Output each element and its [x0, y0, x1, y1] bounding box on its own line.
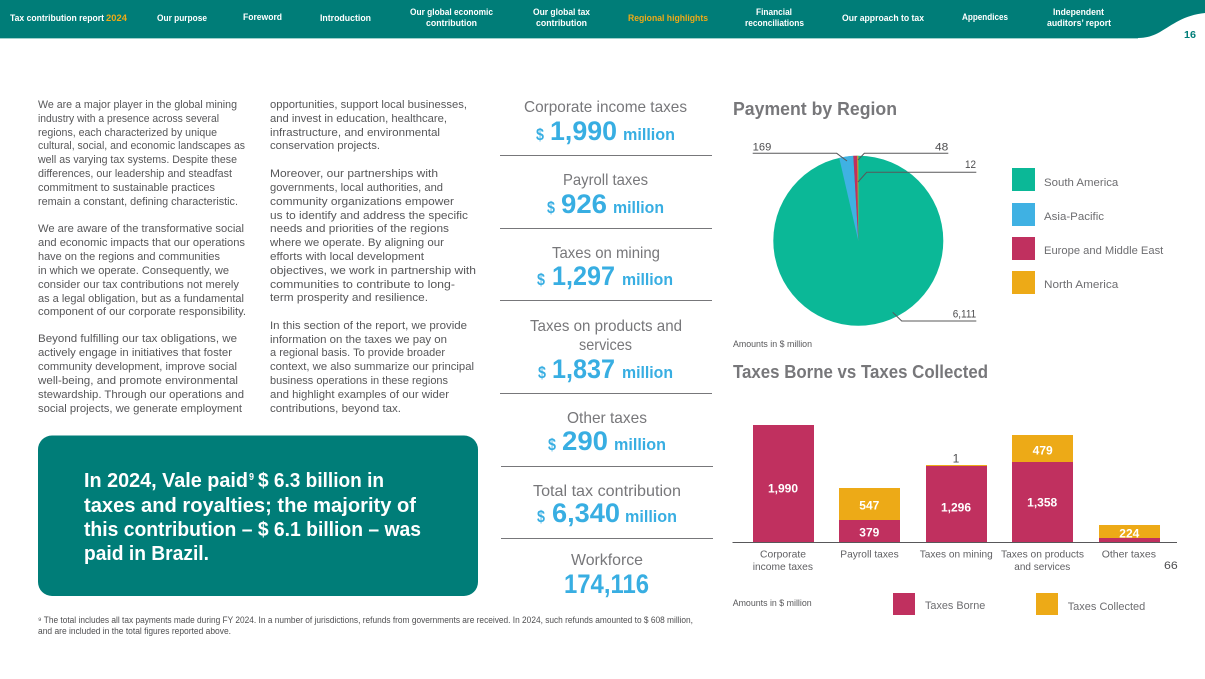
body text column 2: and invest in education, healthcare, [270, 113, 447, 125]
stat: payroll taxes: Payroll taxes [563, 172, 648, 189]
body text column 2: context, we also summarize our principal [270, 361, 474, 373]
heading: payment by region: Payment by Region [733, 98, 897, 119]
body text column 1: actively engage in initiatives that foster [38, 347, 232, 359]
body text column 1: well-being, and promote environmental [37, 375, 238, 387]
stat: corporate income taxes: million [623, 125, 675, 144]
body text column 1: component of our corporate responsibility. [38, 306, 246, 318]
callout: 2024 summary: In 2024, Vale paid [84, 470, 248, 492]
bar: taxes on products and services: 479 [1033, 443, 1053, 457]
axis labels: income taxes [753, 561, 813, 573]
pie chart: payment by region: 6,111 [953, 308, 976, 320]
top navigation bar: Financial [756, 7, 792, 18]
bar: payroll taxes: 379 [859, 526, 880, 540]
body text column 1: We are a major player in the global mining [38, 99, 237, 111]
callout: 2024 summary: 9 [249, 472, 254, 483]
top navigation bar: Our global economic [410, 7, 493, 18]
body text column 2 [269, 99, 476, 415]
bar: corporate income taxes [753, 425, 814, 542]
top navigation bar: Our global tax [533, 7, 591, 18]
body text column 2: conservation projects. [270, 140, 380, 152]
stat: payroll taxes: $ [547, 198, 555, 217]
body text column 1: well as varying tax systems. Despite these [37, 154, 237, 166]
bar: other taxes [1099, 525, 1160, 542]
stat: total tax contribution: Total tax contribution [533, 483, 681, 500]
body text column 1 [37, 99, 246, 415]
top navigation bar: Tax contribution report [10, 13, 105, 24]
stat: other taxes: Other taxes [567, 410, 647, 427]
callout: 2024 summary: $ 6.3 billion in [258, 470, 384, 492]
callout: 2024 summary: paid in Brazil. [84, 543, 209, 565]
axis labels: Corporate [760, 548, 806, 560]
stat: total tax contribution [533, 483, 681, 528]
stat: taxes on mining: million [622, 270, 673, 289]
body text column 2: contributions, beyond tax. [270, 403, 401, 415]
legend: regions: North America [1044, 279, 1119, 291]
body text column 2: us to identify and address the specific [270, 210, 469, 222]
stat: other taxes [548, 410, 666, 456]
body text column 1: and economic impacts that our operations [38, 237, 245, 249]
top navigation bar: Introduction [320, 13, 371, 24]
footnote [38, 615, 693, 636]
note: pie amounts: Amounts in $ million [733, 339, 812, 349]
pie chart: payment by region [753, 142, 976, 326]
body text column 1: consider our tax contributions not merely [38, 279, 239, 291]
body text column 2: needs and priorities of the regions [270, 223, 450, 235]
body text column 2: efforts with local development [270, 251, 424, 263]
stat: taxes on products and services: $ [538, 363, 546, 382]
stat: corporate income taxes: $ [536, 125, 544, 144]
top navigation bar: Independent [1053, 7, 1105, 18]
callout: 2024 summary: this contribution – $ 6.1 billion – was [84, 519, 421, 541]
bar: taxes on mining: 1,296 [941, 500, 971, 514]
body text column 1: stewardship. Through our operations and [38, 389, 244, 401]
stat: corporate income taxes [524, 99, 687, 146]
body text column 1: commitment to sustainable practices [38, 182, 215, 194]
footnote: and are included in the total figures reported above. [38, 626, 231, 636]
body text column 2: business operations in these regions [270, 375, 448, 387]
body text column 1: community development, improve social [38, 361, 237, 373]
top navigation bar: Appendices [962, 12, 1008, 23]
body text column 1: remain a constant, defining characteristic. [38, 196, 238, 208]
body text column 2: objectives, we work in partnership with [270, 265, 476, 277]
stat: taxes on products and services: Taxes on products and [530, 318, 682, 335]
body text column 2: and highlight examples of our wider [270, 389, 449, 401]
footnote: ⁹ The total includes all tax payments made during FY 2024. In a number of jurisdictions, refunds from governments are received. In 2024, such refunds amounted to $ 608 million, [38, 615, 693, 625]
body text column 2: Moreover, our partnerships with [270, 168, 438, 180]
stat: taxes on mining: 1,297 [552, 261, 615, 291]
heading: taxes borne vs taxes collected: Taxes Borne vs Taxes Collected [733, 361, 988, 382]
bar: taxes on products and services [1012, 435, 1073, 542]
body text column 1: Beyond fulfilling our tax obligations, we [38, 333, 237, 345]
callout: 2024 summary: taxes and royalties; the majority of [84, 495, 416, 517]
stacked bar chart [732, 425, 1178, 573]
stat: total tax contribution: 6,340 [552, 498, 620, 528]
body text column 1: differences, our leadership and steadfast [38, 168, 232, 180]
stat: other taxes: $ [548, 435, 556, 454]
bar: taxes on mining [926, 452, 987, 542]
bar: taxes on mining: 1 [953, 452, 960, 466]
top navigation bar: Regional highlights [628, 13, 708, 24]
top navigation bar: Our approach to tax [842, 13, 925, 24]
body text column 1: We are aware of the transformative social [38, 223, 244, 235]
body text column 2: information on the taxes we pay on [270, 334, 447, 346]
top navigation bar: reconciliations [745, 18, 804, 29]
stat: workforce: 174,116 [564, 569, 649, 599]
legend: taxes borne and collected [893, 593, 1145, 615]
top navigation bar: contribution [536, 18, 587, 29]
stat: taxes on products and services: 1,837 [552, 354, 615, 384]
legend: regions: Europe and Middle East [1044, 245, 1163, 257]
bar: payroll taxes [839, 488, 900, 542]
stat: taxes on products and services [530, 318, 682, 384]
top navigation bar: Foreword [243, 12, 282, 23]
stat: other taxes: million [614, 435, 666, 454]
top navigation bar: 2024 [106, 13, 128, 24]
pie chart: payment by region: 169 [753, 142, 771, 154]
stat: taxes on products and services: million [622, 363, 673, 382]
stat: payroll taxes [547, 172, 664, 219]
body text column 1: cultural, social, and economic landscapes as [38, 140, 245, 152]
body text column 1: as a legal obligation, but as a fundamental [38, 293, 244, 305]
stat: total tax contribution: million [625, 507, 677, 526]
body text column 1: in which we operate. Consequently, we [38, 265, 229, 277]
body text column 2: a regional basis. To provide broader [270, 347, 445, 359]
bar: corporate income taxes: 1,990 [768, 482, 798, 496]
stat: taxes on mining [537, 245, 673, 291]
body text column 2: infrastructure, and environmental [270, 127, 440, 139]
stat: workforce [564, 552, 649, 599]
callout: 2024 summary [38, 436, 478, 596]
axis labels: and services [1014, 561, 1070, 573]
axis labels: Taxes on products [1001, 548, 1084, 560]
top navigation bar: contribution [426, 18, 477, 29]
body text column 1: industry with a presence across several [38, 113, 219, 125]
body text column 1: social projects, we generate employment [38, 403, 242, 415]
bar: payroll taxes: 547 [859, 498, 880, 512]
top navigation bar: auditors’ report [1047, 18, 1112, 29]
legend: taxes borne and collected: Taxes Collected [1068, 601, 1145, 613]
top navigation bar [0, 0, 1205, 39]
other taxes borne value: 66 [1164, 560, 1178, 572]
nav background with wave [0, 0, 1205, 38]
legend: regions: South America [1044, 177, 1119, 189]
stat: taxes on mining: Taxes on mining [552, 245, 660, 262]
bar: taxes on products and services: 1,358 [1027, 496, 1058, 510]
body text column 2: term prosperity and resilience. [270, 292, 428, 304]
body text column 2: In this section of the report, we provide [270, 320, 467, 332]
axis labels [753, 548, 1156, 573]
stat: other taxes: 290 [562, 426, 608, 456]
stat: corporate income taxes: 1,990 [550, 116, 617, 146]
note: bar amounts: Amounts in $ million [733, 598, 812, 608]
body text column 1: have on the regions and communities [38, 251, 220, 263]
stat: corporate income taxes: Corporate income taxes [524, 99, 687, 116]
body text column 2: community organizations empower [270, 196, 454, 208]
body text column 1: regions, each characterized by unique [38, 127, 217, 139]
axis labels: Taxes on mining [920, 548, 993, 560]
body text column 2: governments, local authorities, and [270, 182, 443, 194]
stat: taxes on mining: $ [537, 270, 545, 289]
bar: other taxes: 224 [1119, 527, 1140, 541]
legend: regions [1012, 168, 1163, 294]
stat: workforce: Workforce [571, 552, 643, 569]
pie chart: payment by region: 48 [935, 142, 948, 154]
body text column 2: where we operate. By aligning our [269, 237, 444, 249]
top navigation bar: Our purpose [157, 13, 207, 24]
legend: regions: Asia-Pacific [1044, 211, 1105, 223]
stat: taxes on products and services: services [579, 337, 632, 354]
body text column 2: communities to contribute to long- [270, 279, 455, 291]
axis labels: Payroll taxes [840, 548, 899, 560]
axis labels: Other taxes [1102, 548, 1156, 560]
page number: 16 [1184, 29, 1196, 41]
stat: payroll taxes: million [613, 198, 664, 217]
stat: total tax contribution: $ [537, 507, 545, 526]
body text column 2: opportunities, support local businesses, [270, 99, 467, 111]
legend: taxes borne and collected: Taxes Borne [925, 600, 985, 612]
pie chart: payment by region: 12 [965, 159, 976, 171]
stat: payroll taxes: 926 [561, 189, 607, 219]
